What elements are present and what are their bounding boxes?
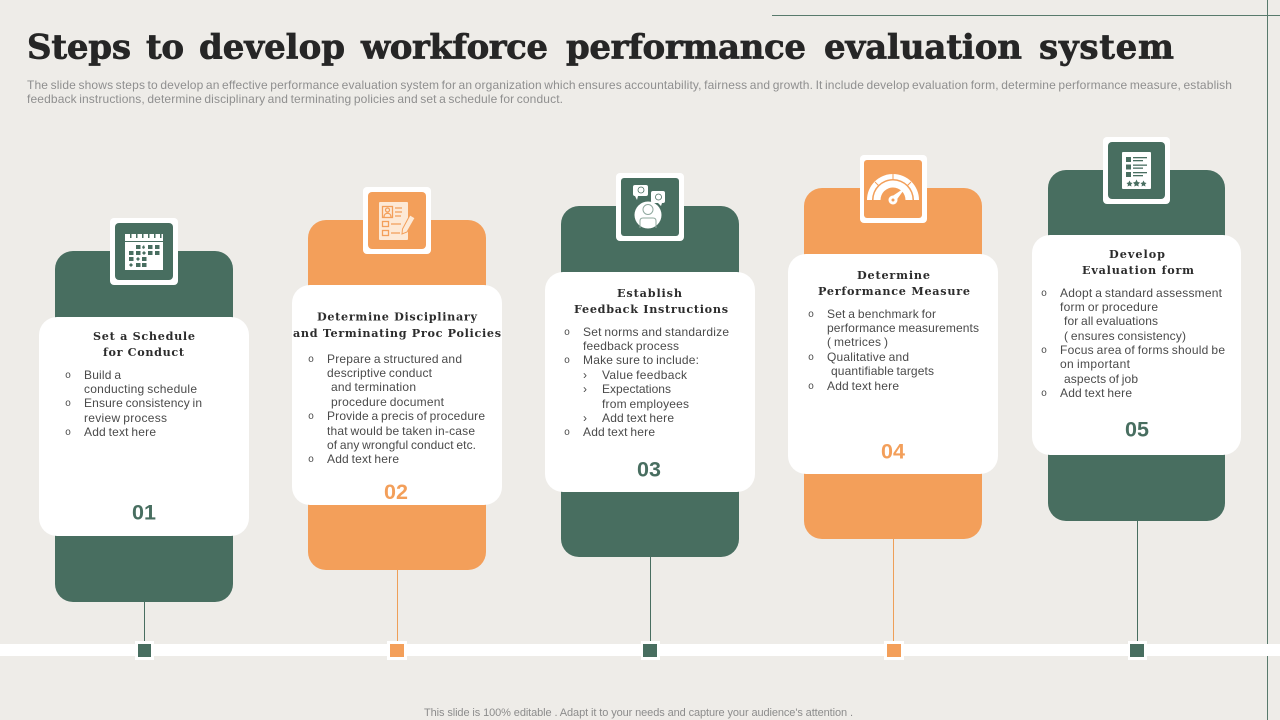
icon: gauge xyxy=(860,155,927,223)
panel: step 03 feedback xyxy=(545,173,755,660)
title: develop xyxy=(199,28,345,68)
timeline bar xyxy=(0,644,1280,656)
heading 05: Evaluation form xyxy=(1082,263,1194,277)
bullet list 04: o xyxy=(808,382,814,393)
bullet list 02: o xyxy=(308,355,314,366)
timeline node 04 xyxy=(884,641,904,660)
panel: step 01 schedule xyxy=(39,218,249,660)
bullet list 04 xyxy=(808,307,979,393)
bullet list 03: feedback process xyxy=(583,339,679,353)
bullet list 05: Add text here xyxy=(1060,386,1132,400)
subtitle description xyxy=(27,78,1232,106)
bullet list 01: Add text here xyxy=(84,425,156,439)
bullet list 05: for all evaluations xyxy=(1064,314,1158,328)
title: to xyxy=(146,28,184,68)
icon: document with pencil xyxy=(363,187,431,254)
heading 01: for Conduct xyxy=(103,345,185,359)
bullet list 03: Set norms and standardize xyxy=(583,325,729,339)
panel: step 04 performance measure xyxy=(788,155,998,660)
bullet list 04: Set a benchmark for xyxy=(827,307,936,321)
heading 04: Determine xyxy=(857,268,930,282)
subtitle description: The slide shows steps to develop an effective performance evaluation system for an organization which ensures accountability, fairness and growth. It include develop evaluation form, determine performance measure, establish xyxy=(27,78,1232,92)
number 05: 05 xyxy=(1125,418,1149,442)
bullet list 04: quantifiable targets xyxy=(831,364,934,378)
icon: calendar xyxy=(110,218,178,285)
bullet list 05: on important xyxy=(1060,357,1131,371)
bullet list 01: o xyxy=(65,371,71,382)
bullet list 02: Add text here xyxy=(327,452,399,466)
connector 03 xyxy=(650,557,652,645)
heading 04: Performance Measure xyxy=(818,284,970,298)
card 02 xyxy=(292,285,502,505)
timeline node 03 xyxy=(641,641,660,660)
bullet list 03: Value feedback xyxy=(602,368,688,382)
bullet list 03: Add text here xyxy=(583,425,655,439)
bullet list 05: aspects of job xyxy=(1064,372,1138,386)
card 01 xyxy=(39,317,249,536)
bullet list 03: › xyxy=(583,382,587,396)
timeline node 01 xyxy=(135,641,154,660)
bullet list 03: o xyxy=(564,328,570,339)
number 03: 03 xyxy=(637,458,661,482)
title: Steps xyxy=(27,28,131,68)
bullet list 05: Adopt a standard assessment xyxy=(1060,286,1223,300)
title: performance xyxy=(566,28,806,68)
bullet list 03 xyxy=(564,325,729,439)
title: workforce xyxy=(360,28,548,68)
heading 03: Establish xyxy=(617,286,682,300)
heading 05 xyxy=(1082,247,1194,277)
number 04: 04 xyxy=(881,440,905,464)
bullet list 02: o xyxy=(308,412,314,423)
heading 01: Set a Schedule xyxy=(93,329,195,343)
heading 02: and Terminating Proc Policies xyxy=(293,326,501,340)
bullet list 05: form or procedure xyxy=(1060,300,1158,314)
bullet list 05: ( ensures consistency) xyxy=(1064,329,1186,343)
bullet list 05: Focus area of forms should be xyxy=(1060,343,1225,357)
number 01: 01 xyxy=(132,500,156,524)
bullet list 02: Provide a precis of procedure xyxy=(327,409,485,423)
bullet list 04: o xyxy=(808,353,814,364)
connector 05 xyxy=(1136,521,1138,645)
timeline node 02 xyxy=(387,641,407,660)
footer note: This slide is 100% editable . Adapt it to your needs and capture your audience's attention . xyxy=(424,707,853,719)
icon: employee feedback xyxy=(616,173,684,241)
card backing 04 xyxy=(804,188,982,539)
bullet list 03: › xyxy=(583,411,587,425)
bullet list 01: o xyxy=(65,428,71,439)
icon: checklist xyxy=(1103,137,1170,204)
bullet list 02: of any wrongful conduct etc. xyxy=(327,438,476,452)
bullet list 03: Add text here xyxy=(602,411,674,425)
bullet list 03: o xyxy=(564,356,570,367)
bullet list 01: Ensure consistency in xyxy=(84,396,202,410)
bullet list 03: › xyxy=(583,368,587,382)
card backing 05 xyxy=(1048,170,1225,521)
heading 02: Determine Disciplinary xyxy=(317,310,477,324)
timeline node 05 xyxy=(1128,641,1147,660)
bullet list 03: from employees xyxy=(602,397,689,411)
bullet list 05: o xyxy=(1041,389,1047,400)
heading 04 xyxy=(818,268,970,298)
card 04 xyxy=(788,254,998,474)
connector 01 xyxy=(144,602,146,645)
bullet list 04: Qualitative and xyxy=(827,350,909,364)
card backing 02 xyxy=(308,220,486,570)
bullet list 04: ( metrices ) xyxy=(827,335,888,349)
heading 02 xyxy=(293,310,501,340)
heading 05: Develop xyxy=(1109,247,1165,261)
heading 03: Feedback Instructions xyxy=(574,302,728,316)
card 03 xyxy=(545,272,755,492)
bullet list 03: o xyxy=(564,428,570,439)
connector 04 xyxy=(892,539,894,645)
title: evaluation xyxy=(824,28,1022,68)
bullet list 03: Make sure to include: xyxy=(583,353,699,367)
bullet list 04: Add text here xyxy=(827,379,899,393)
bullet list 01: o xyxy=(65,399,71,410)
bullet list 01: conducting schedule xyxy=(84,382,197,396)
bullet list 01: review process xyxy=(84,411,167,425)
bullet list 04: o xyxy=(808,310,814,321)
subtitle description: feedback instructions, determine disciplinary and terminating policies and set a schedule for conduct. xyxy=(27,92,563,106)
bullet list 05: o xyxy=(1041,289,1047,300)
bullet list 05: o xyxy=(1041,346,1047,357)
connector 02 xyxy=(396,570,398,645)
bullet list 02: descriptive conduct xyxy=(327,366,433,380)
number 02: 02 xyxy=(384,480,408,504)
bullet list 01: Build a xyxy=(84,368,121,382)
bullet list 01 xyxy=(65,368,202,439)
card backing 01 xyxy=(55,251,233,602)
panel: step 05 evaluation form xyxy=(1032,137,1241,660)
bullet list 05 xyxy=(1041,286,1225,400)
title: system xyxy=(1039,28,1174,68)
bullet list 02 xyxy=(308,352,485,466)
bullet list 02: Prepare a structured and xyxy=(327,352,462,366)
bullet list 03: Expectations xyxy=(602,382,671,396)
bullet list 02: o xyxy=(308,455,314,466)
card 05 xyxy=(1032,235,1241,455)
title xyxy=(27,28,1174,68)
bullet list 04: performance measurements xyxy=(827,321,979,335)
heading 03 xyxy=(574,286,728,316)
panel: step 02 disciplinary xyxy=(292,187,502,660)
bullet list 02: that would be taken in-case xyxy=(327,424,475,438)
bullet list 02: and termination xyxy=(331,380,416,394)
card backing 03 xyxy=(561,206,739,557)
bullet list 02: procedure document xyxy=(331,395,445,409)
heading 01 xyxy=(93,329,195,359)
